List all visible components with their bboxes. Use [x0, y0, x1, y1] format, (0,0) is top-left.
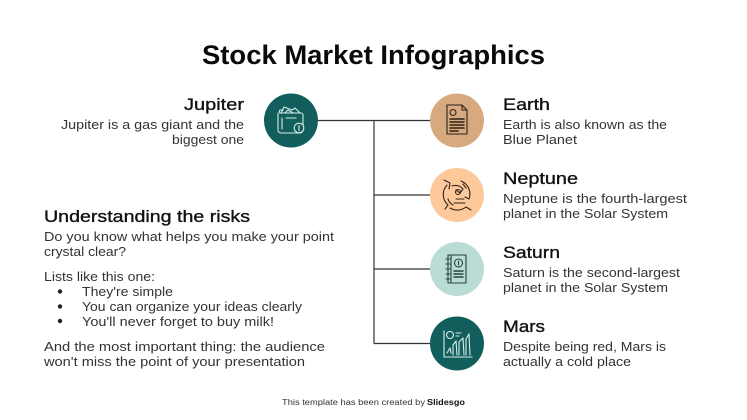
block: Mars: Mars [503, 317, 545, 336]
block: Jupiter: biggest one [172, 132, 244, 147]
footer credit: This template has been created by [282, 398, 425, 407]
block: Saturn: Saturn is the second-largest [503, 265, 680, 280]
title: Stock Market Infographics [202, 40, 545, 70]
icon: growth chart [430, 316, 484, 370]
block: Jupiter: Jupiter is a gas giant and the [61, 117, 244, 132]
block: Mars [503, 317, 667, 369]
block: Earth: Earth [503, 95, 550, 114]
block: Understanding the risks: Do you know what helps you make your point [44, 229, 334, 244]
block: Neptune: planet in the Solar System [503, 206, 668, 221]
block: Understanding the risks [43, 207, 334, 369]
icon: notebook [430, 242, 484, 296]
block: Understanding the risks: You can organize your ideas clearly [82, 299, 303, 314]
block: Understanding the risks: won't miss the point of your presentation [43, 354, 305, 369]
footer credit: Slidesgo [427, 398, 465, 407]
block: Understanding the risks: Lists like this one: [44, 269, 155, 284]
icon: document [430, 94, 484, 148]
footer credit [282, 398, 465, 407]
block: Mars: Despite being red, Mars is [503, 339, 667, 354]
icon: circular arrows [430, 168, 484, 222]
icon: wallet [264, 94, 318, 148]
block: Saturn: Saturn [503, 243, 560, 262]
block: Jupiter: Jupiter [184, 95, 244, 114]
block: Understanding the risks: You'll never forget to buy milk! [82, 314, 274, 329]
block: Neptune: Neptune is the fourth-largest [503, 191, 687, 206]
block: Neptune: Neptune [503, 169, 578, 188]
block: Mars: actually a cold place [503, 354, 631, 369]
block: Saturn [503, 243, 680, 295]
block: Understanding the risks: And the most important thing: the audience [44, 339, 325, 354]
block: Understanding the risks: Understanding the risks [44, 207, 250, 226]
block: Saturn: planet in the Solar System [503, 280, 668, 295]
block: Neptune [503, 169, 687, 221]
block: Earth: Earth is also known as the [503, 117, 667, 132]
block: Earth: Blue Planet [503, 132, 577, 147]
connector lines [317, 120, 431, 344]
block: Understanding the risks: crystal clear? [44, 244, 126, 259]
block: Understanding the risks: They're simple [82, 284, 173, 299]
block: Earth [503, 95, 667, 147]
block: Jupiter [61, 95, 244, 147]
